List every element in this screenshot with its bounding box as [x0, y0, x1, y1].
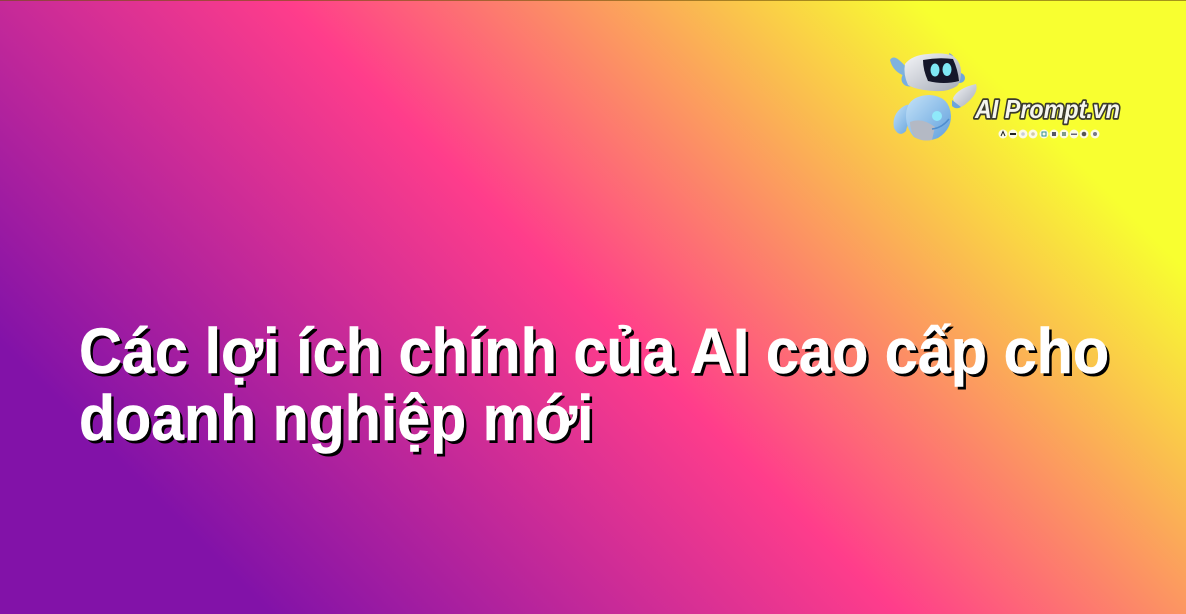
title: Các lợi ích chính của AI cao cấp cho	[79, 315, 1109, 387]
title: doanh nghiệp mới	[79, 382, 594, 454]
logo wordmark: AI Prompt.vn	[974, 94, 1120, 124]
title	[79, 315, 1110, 456]
icon: robot mascot	[890, 53, 977, 140]
logo toolbar icons	[998, 130, 1100, 138]
